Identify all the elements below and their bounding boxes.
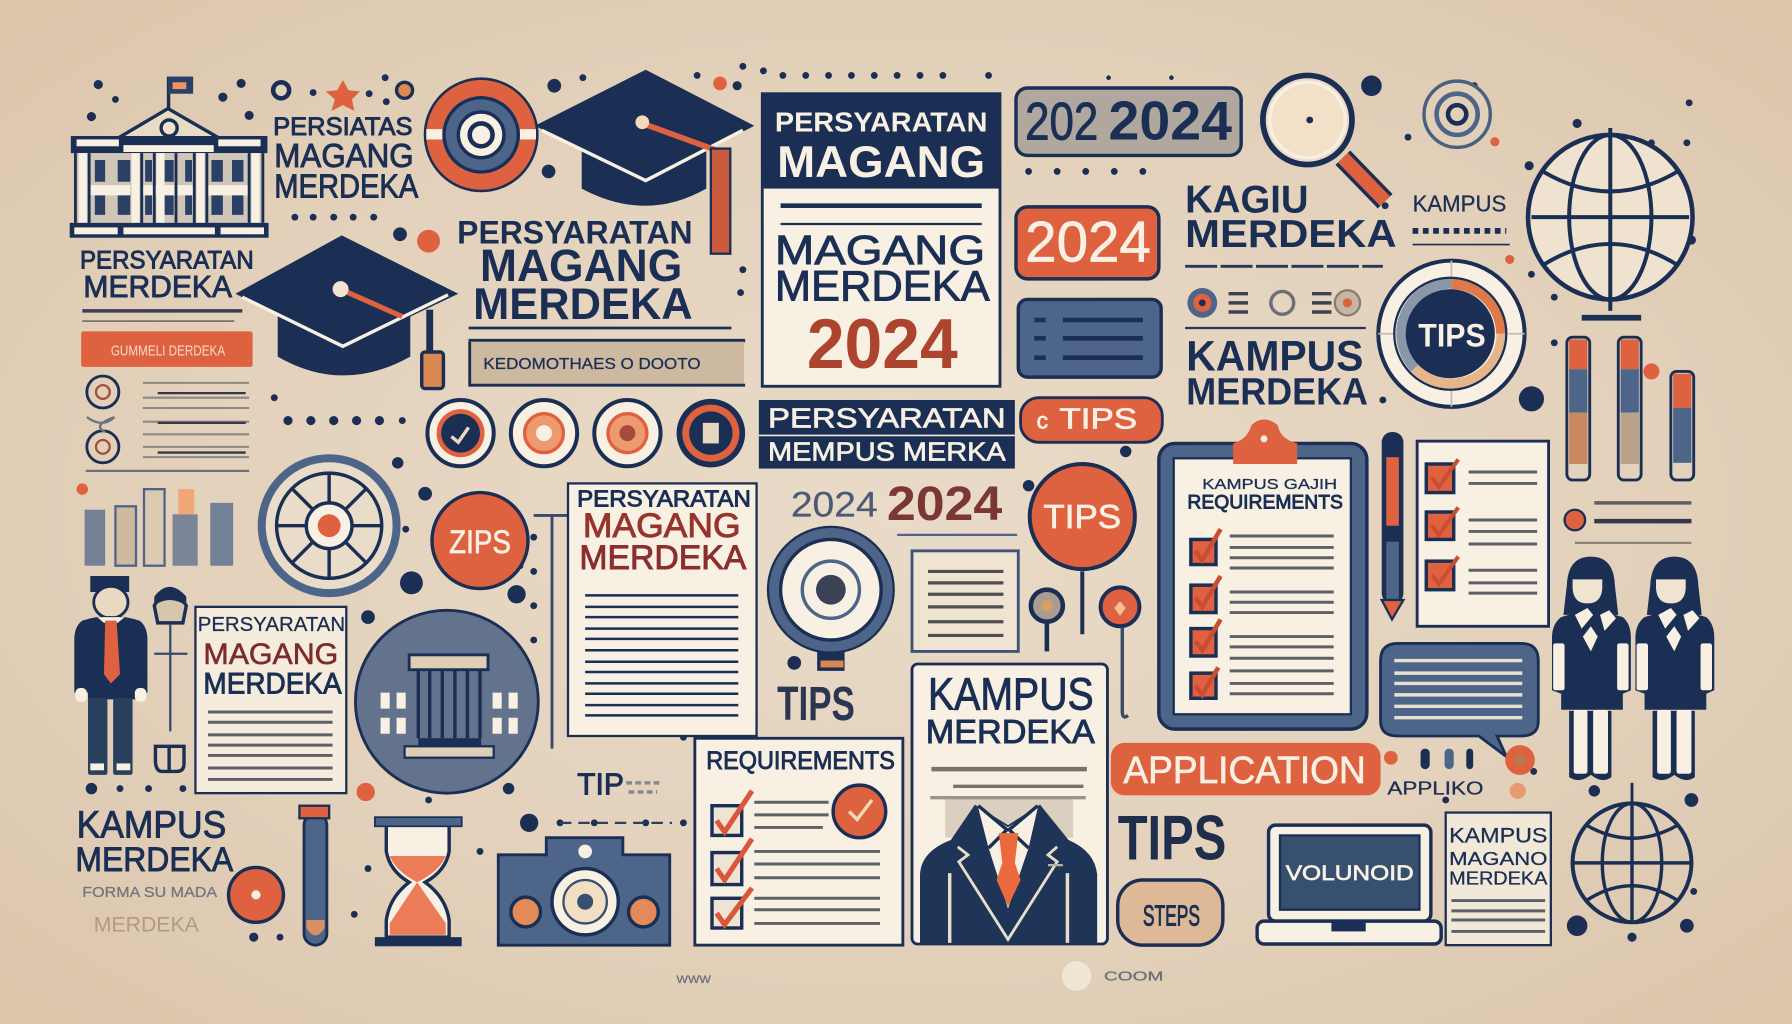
icon: tips sign [1030, 464, 1135, 634]
heading: kampus merdeka: MERDEKA [1186, 371, 1368, 413]
icon: building circle [355, 610, 538, 793]
text: kampus small: KAMPUS [1413, 190, 1506, 216]
heading: persyaratan merdeka left [80, 247, 254, 321]
icon: graduation cap top [535, 70, 754, 254]
footer text: COOM [1104, 970, 1163, 984]
panel: checklist document [1417, 441, 1549, 626]
banner: persyaratan mempus merka: MEMPUS MERKA [768, 437, 1006, 467]
heading: kampus merdeka bottom-left: MERDEKA [75, 841, 233, 879]
accent dots [77, 77, 1659, 801]
heading: persiatas magang merdeka: PERSIATAS [273, 113, 413, 141]
icon: small target [1424, 81, 1490, 147]
badge: 202 2024 [1016, 88, 1241, 155]
icon: laptop [1257, 825, 1441, 944]
connector line [534, 515, 569, 749]
faded text: FORMA SU MADA [82, 885, 217, 901]
panel: requirements document [695, 738, 903, 945]
text: kampus small [1413, 190, 1510, 245]
panel: document left [195, 607, 346, 793]
suit [920, 805, 1097, 944]
icon: laptop: VOLUNOID [1286, 860, 1414, 885]
icon: globe top [1528, 128, 1693, 318]
badge: 202 2024: 202 [1025, 92, 1098, 151]
panel: requirements document: REQUIREMENTS [706, 747, 895, 775]
banner: persyaratan mempus merka [759, 400, 1015, 469]
icon: magnifier [1263, 75, 1385, 201]
icon: globe bottom [1573, 783, 1691, 923]
panel: small document [1446, 813, 1551, 945]
pill: steps: STEPS [1143, 901, 1200, 933]
text: tip faded [560, 766, 672, 823]
heading: persiatas magang merdeka: MERDEKA [274, 169, 419, 206]
card: small document [912, 551, 1018, 651]
icon: orange circle [229, 867, 283, 922]
icon: orange flower and labels [1384, 745, 1535, 799]
banner: persyaratan mempus merka: PERSYARATAN [768, 402, 1006, 433]
chart: small bars [85, 489, 233, 566]
icon: building [70, 77, 269, 238]
heading: persyaratan merdeka left: PERSYARATAN [80, 247, 254, 275]
heading: persyaratan magang merdeka: MERDEKA [473, 280, 693, 329]
footer glow [1062, 961, 1091, 991]
pill: tips: TIPS [1059, 404, 1137, 436]
heading: persyaratan magang merdeka [457, 214, 693, 329]
heading: persiatas magang merdeka: MAGANG [274, 138, 414, 175]
small ring icons top [273, 82, 413, 98]
badge: 202 2024: 2024 [1109, 89, 1232, 151]
heading: kampus merdeka [1186, 332, 1368, 413]
panel: main document: 2024 [807, 305, 958, 384]
icon: orange flower and labels: APPLIKO [1387, 777, 1483, 798]
icon: woman figure right [1635, 557, 1714, 780]
text: tips: TIPS [777, 678, 855, 731]
heading: kagiu merdeka: KAGIU [1185, 179, 1309, 222]
text: tip faded: TIP [577, 766, 624, 801]
pill: tips: c [1037, 408, 1048, 434]
chart: vertical tubes [1567, 337, 1694, 480]
panel: kampus merdeka suit document: MERDEKA [926, 714, 1096, 751]
document header: PERSYARATAN [775, 106, 987, 137]
panel: small document: KAMPUS [1449, 822, 1547, 847]
icon: figure small [154, 587, 187, 771]
row: small icons [1185, 266, 1383, 328]
heading: persyaratan merdeka left: MERDEKA [83, 269, 232, 304]
panel: document centre [568, 483, 757, 736]
panel: clipboard requirements: REQUIREMENTS [1187, 492, 1343, 514]
pill: tips [1021, 398, 1162, 442]
document header: MAGANG [777, 138, 985, 187]
icon: camera [498, 838, 670, 945]
heading: kampus merdeka: KAMPUS [1186, 332, 1363, 379]
list with icons [86, 376, 249, 471]
footer text: WWW [677, 974, 711, 986]
card: slate lines [1018, 299, 1161, 377]
panel: clipboard requirements [1159, 419, 1367, 729]
icon: tube [299, 806, 329, 945]
panel: tan text box [469, 328, 745, 385]
faded text [82, 885, 217, 936]
panel: small document: MAGANO [1449, 848, 1547, 869]
panel: document left: MERDEKA [203, 668, 342, 701]
panel: tan text box: KEDOMOTHAES O DOOTO [483, 356, 701, 373]
heading: kagiu merdeka [1185, 179, 1397, 256]
heading: kagiu merdeka: MERDEKA [1185, 213, 1397, 256]
icon: magnifier target [768, 527, 894, 671]
small note top of women [1565, 503, 1691, 543]
heading: kampus merdeka bottom-left [75, 804, 233, 879]
icon: person left [74, 576, 147, 775]
button: orange bar: GUMMELI DERDEKA [111, 343, 225, 359]
panel: kampus merdeka suit document [912, 664, 1107, 944]
speech bubble [1381, 643, 1538, 757]
icon: target top [425, 79, 537, 191]
icon: graduation cap left [235, 235, 458, 389]
icon: pins [1031, 587, 1139, 717]
panel: clipboard requirements: KAMPUS GAJIH [1202, 477, 1337, 493]
badge: 2024 orange: 2024 [1025, 211, 1151, 275]
document header [762, 94, 1000, 189]
icon: tips circle [1378, 261, 1525, 407]
heading: persyaratan magang merdeka: PERSYARATAN [457, 214, 693, 250]
text: 2024 double [791, 478, 1017, 535]
badge: zips [432, 493, 528, 589]
icon: tips sign: TIPS [1043, 499, 1121, 536]
panel: document left: PERSYARATAN [198, 613, 345, 636]
icon: pen [1382, 432, 1403, 619]
icons: four circle badges [427, 399, 745, 467]
heading: persiatas magang merdeka [273, 113, 419, 206]
text: 2024 double: 2024 [791, 485, 878, 525]
text: tips large: TIPS [1118, 803, 1226, 873]
scattered dots [86, 63, 1698, 942]
heading: kampus merdeka bottom-left: KAMPUS [77, 804, 226, 846]
panel: main document [762, 94, 1000, 386]
panel: main document: MAGANG [775, 227, 985, 273]
panel: document left: MAGANG [203, 638, 338, 671]
panel: main document: MERDEKA [775, 263, 991, 310]
pill: steps [1118, 880, 1223, 945]
panel: document centre: MERDEKA [579, 539, 746, 577]
icon: hourglass [375, 817, 462, 946]
badge: zips: ZIPS [449, 524, 511, 560]
icon: tips circle: TIPS [1418, 317, 1486, 353]
panel: small document: MERDEKA [1449, 868, 1548, 889]
text: 2024 double: 2024 [887, 478, 1003, 531]
footer text [677, 970, 1163, 986]
faded text: MERDEKA [94, 911, 199, 936]
icon: wheel [262, 458, 397, 593]
icon: woman figure left [1552, 557, 1631, 780]
button: orange bar [81, 331, 253, 367]
panel: kampus merdeka suit document: KAMPUS [928, 669, 1094, 720]
clip [1233, 419, 1297, 464]
pill: application: APPLICATION [1123, 749, 1366, 791]
panel: document centre: PERSYARATAN [577, 485, 751, 511]
panel: document centre: MAGANG [583, 507, 741, 545]
heading: persyaratan magang merdeka: MAGANG [480, 240, 682, 291]
